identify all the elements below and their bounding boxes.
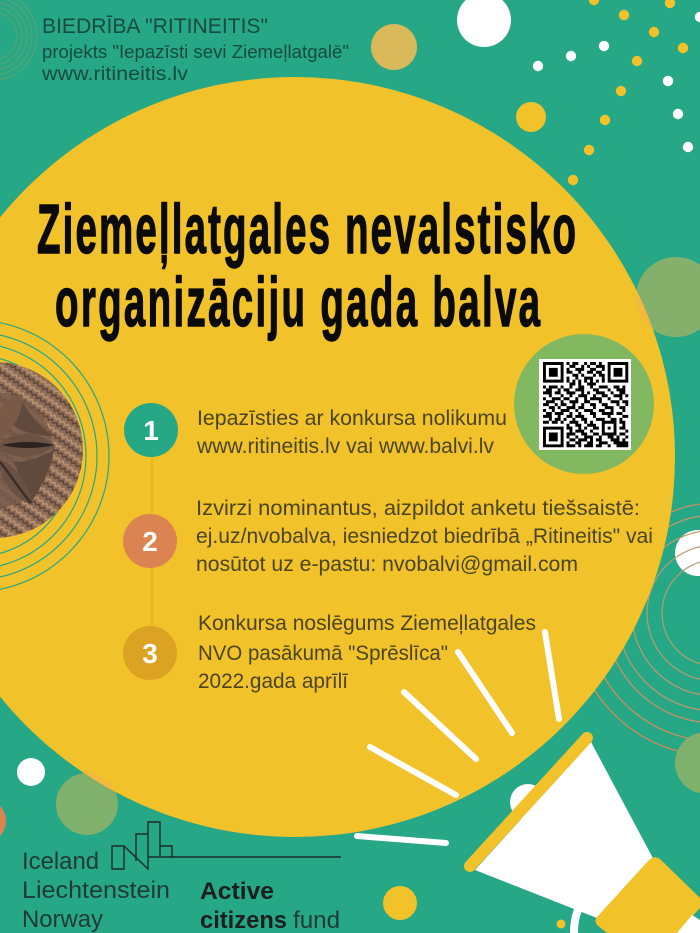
step 1: www.ritineitis.lv vai www.balvi.lv [196,435,494,458]
step 2 [123,497,653,576]
step 1: 1 [143,415,159,446]
funder logo: Iceland Liechtenstein Norway Active citizens fund: Iceland [22,848,99,875]
step 2: ej.uz/nvobalva, iesniedzot biedrībā „Ritineitis" vai [196,525,653,548]
dots top right [533,0,700,185]
orange circle bottom left [0,799,6,843]
step 1: Iepazīsties ar konkursa nolikumu [197,407,507,430]
header text: projekts "Iepazīsti sevi Ziemeļlatgalē" [42,41,349,62]
step 3 [123,612,536,693]
step 2: 2 [142,526,158,557]
header text: BIEDRĪBA "RITINEITIS" [42,15,268,38]
concentric rings right [572,503,700,756]
title: organizāciju gada balva [55,263,540,341]
megaphone [470,738,700,933]
white circle right [675,530,700,576]
funder logo: Iceland Liechtenstein Norway Active citizens fund: Norway [22,906,103,933]
header text [41,15,349,85]
green circle right upper [636,257,700,337]
title [37,190,576,341]
step 3: 3 [142,638,158,669]
step 3: Konkursa noslēgums Ziemeļlatgales [198,612,536,635]
big yellow circle [0,77,675,837]
step 1 [124,403,507,458]
title: Ziemeļlatgales nevalstisko [37,190,576,269]
green circle bottom left [56,773,118,835]
concentric rings around wood image [0,320,109,592]
funder logo: Iceland Liechtenstein Norway Active citizens fund [22,822,341,933]
white circle bottom left [17,758,45,786]
header text: www.ritineitis.lv [41,64,189,85]
QR code panel [514,334,654,474]
funder logo: Iceland Liechtenstein Norway Active citizens fund: Liechtenstein [22,877,170,904]
funder logo: Iceland Liechtenstein Norway Active citizens fund: Active [200,878,274,905]
yellow dot bottom [383,886,417,920]
concentric rings top left [0,0,37,80]
carved wood rosette image [0,362,83,538]
megaphone sound rays [357,632,559,843]
step 2: nosūtot uz e-pastu: nvobalvi@gmail.com [196,553,578,576]
step 3: NVO pasākumā "Sprēslīca" [198,642,448,665]
overlap tints on yellow circle [84,290,653,792]
green circle right lower [675,732,700,794]
step 2: Izvirzi nominantus, aizpildot anketu tiešsaistē: [196,497,640,520]
decorative circles top [371,0,546,132]
step 3: 2022.gada aprīlī [198,670,348,693]
step connector line [151,457,153,627]
